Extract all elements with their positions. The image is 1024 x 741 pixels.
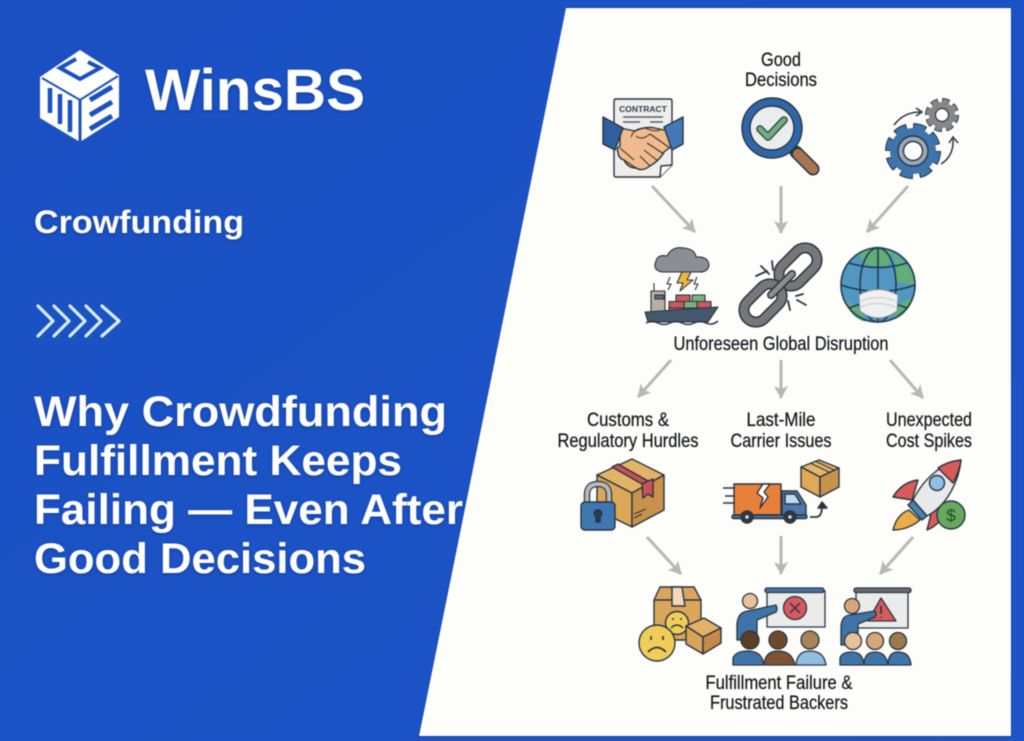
icon: locked package [581,459,664,530]
headline [34,388,463,583]
icon: damaged boxes and sad faces [639,587,721,661]
label: Customs & Regulatory Hurdles: Regulatory Hurdles [558,430,699,452]
heading: Good Decisions: Good [761,49,801,71]
icon: globe with mask [841,246,915,322]
label: Unexpected Cost Spikes: Cost Spikes [886,430,972,452]
icon: magnifier with check [742,98,813,169]
headline: Failing — Even After [34,486,463,534]
label: Fulfillment Failure & Frustrated Backers: Fulfillment Failure & [706,672,852,694]
label: Last-Mile Carrier Issues: Carrier Issues [730,430,832,452]
icon: chevron arrows [38,306,119,336]
arrows: issues to failure [647,536,913,574]
label: Last-Mile Carrier Issues: Last-Mile [746,409,816,431]
icon: broken chain [739,243,822,327]
arrows: row 1 to disruption [652,186,908,233]
headline: Why Crowdfunding [34,388,447,436]
icon: presenter with error slide [733,588,826,665]
label: Unexpected Cost Spikes: Unexpected [886,409,972,431]
icon: contract handshake: CONTRACT [619,104,668,114]
label: Unexpected Cost Spikes [886,409,972,452]
label: Customs & Regulatory Hurdles: Customs & [587,409,669,431]
icon: contract handshake [603,99,683,177]
headline: Good Decisions [34,535,366,583]
label: Fulfillment Failure & Frustrated Backers: Frustrated Backers [710,692,848,714]
icon: rocket with dollar coin: $ [946,506,956,525]
panel: flow diagram [418,7,1012,737]
label: Customs & Regulatory Hurdles [558,409,699,452]
heading: Good Decisions: Decisions [745,69,817,91]
headline: Fulfillment Keeps [34,437,402,485]
icon: storm and cargo ship [645,248,718,324]
heading: Good Decisions [745,49,817,91]
logo: WinsBS cube mark [40,50,119,142]
label: Last-Mile Carrier Issues [730,409,832,452]
brand name: WinsBS [145,58,365,123]
category label: Crowfunding [34,204,244,240]
icon: damaged delivery truck [723,460,839,523]
label: Fulfillment Failure & Frustrated Backers [706,672,852,714]
arrows: disruption to issues [638,360,923,398]
label: Unforeseen Global Disruption: Unforeseen Global Disruption [674,333,888,355]
icon: presenter with warning slide [840,588,911,665]
icon: gears [889,101,958,175]
icon: rocket with dollar coin [893,460,965,530]
